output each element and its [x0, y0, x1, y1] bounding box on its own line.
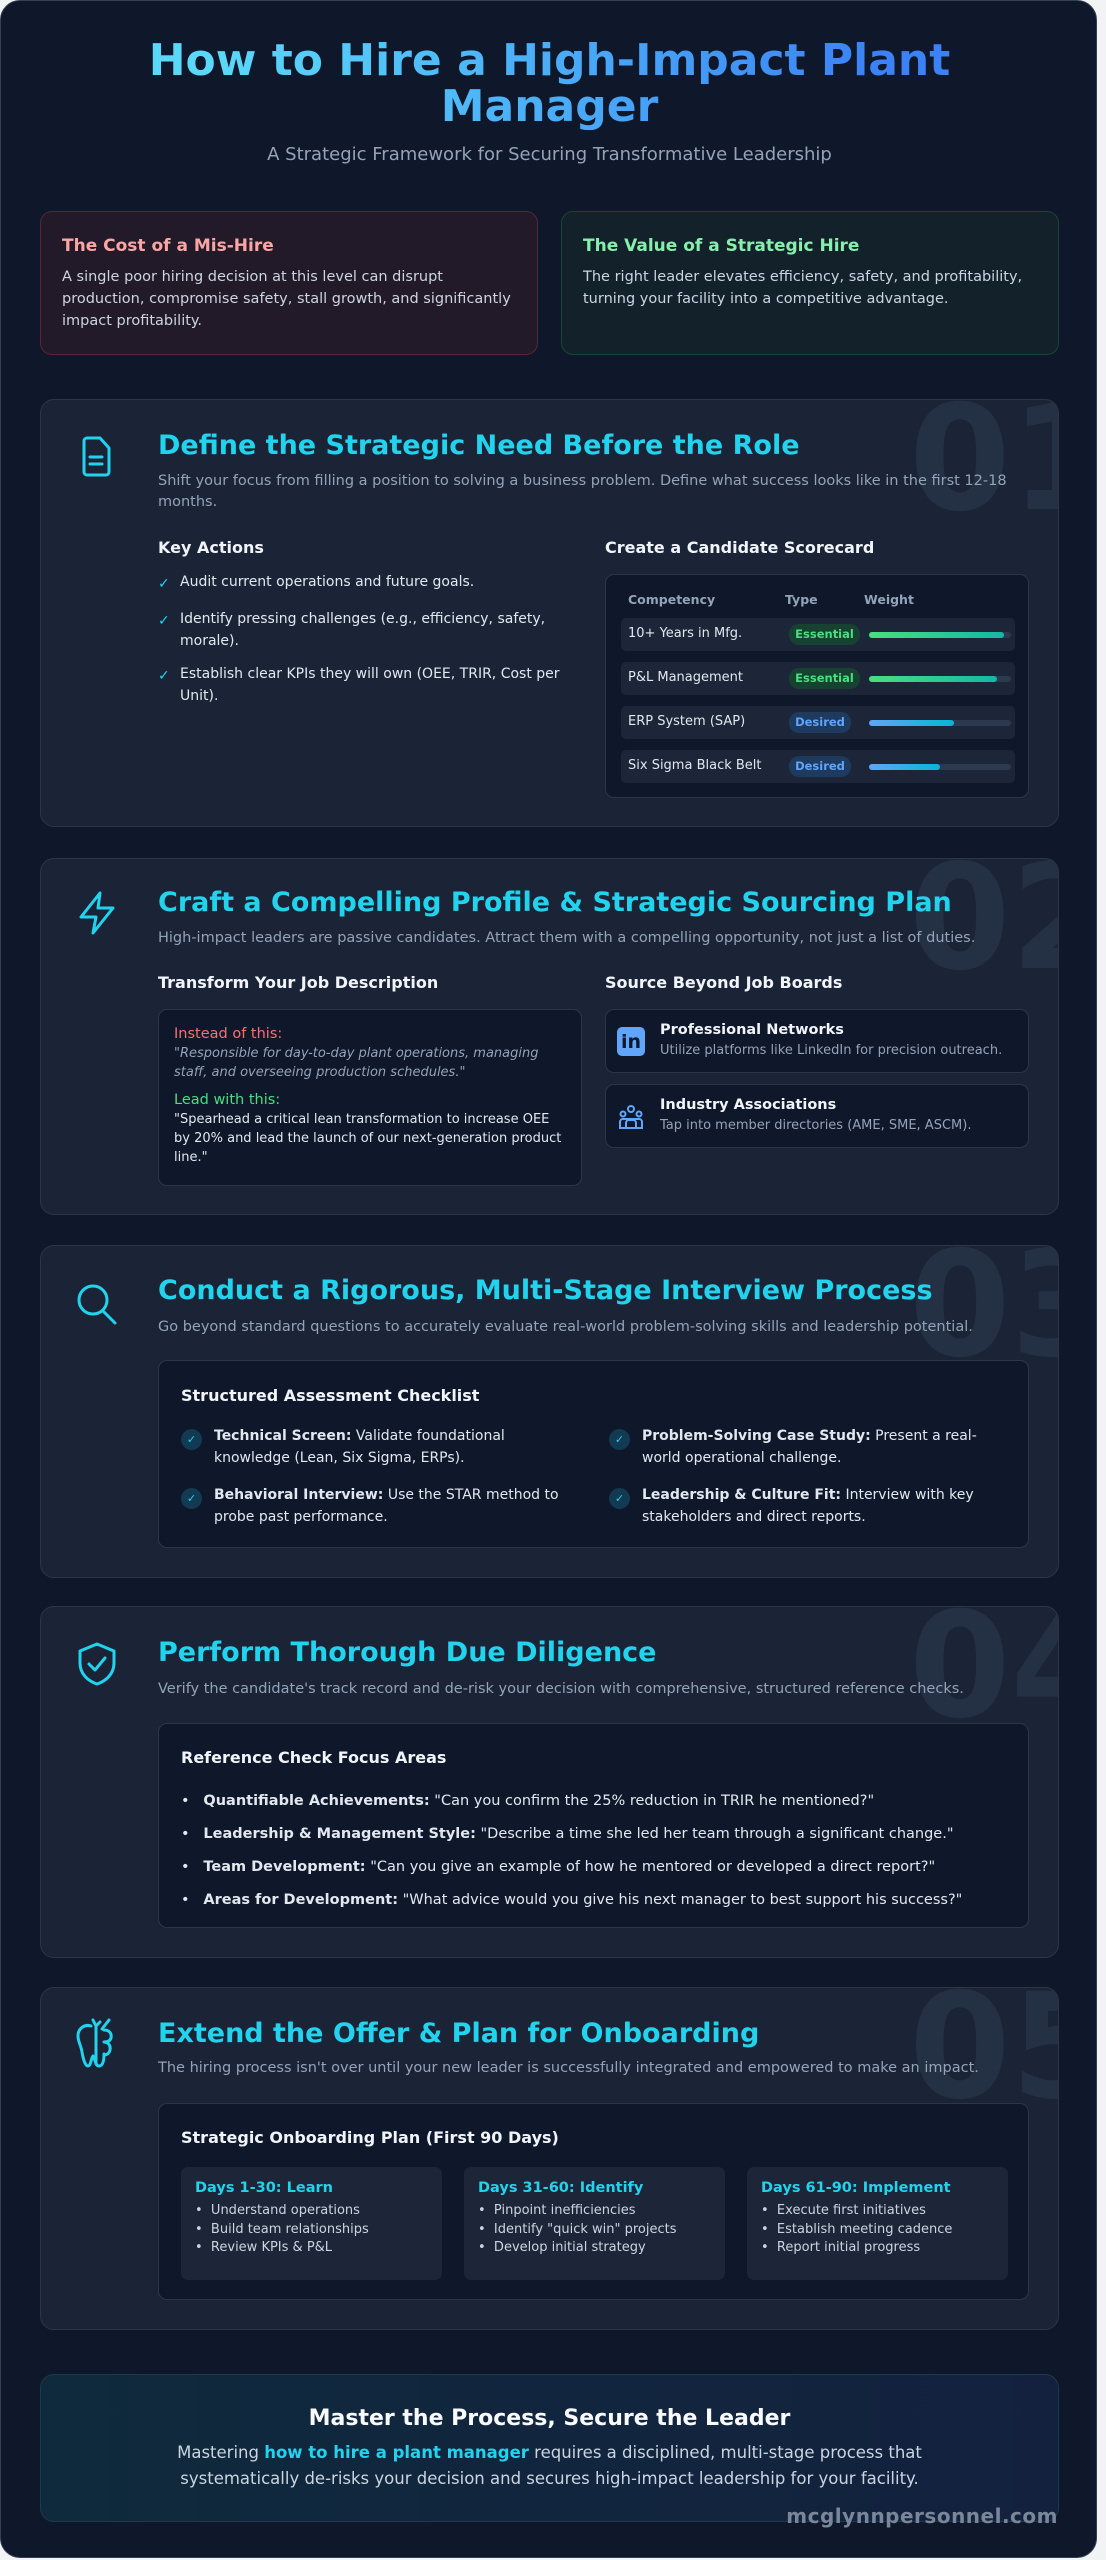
- card: cost of mis-hire: [40, 211, 538, 355]
- title: Manager: [441, 81, 658, 132]
- source: industry associations: Tap into member directories (AME, SME, ASCM).: [660, 1118, 971, 1133]
- title: [1, 38, 1098, 130]
- reference check: • Leadership & Management Style: "Describe a time she led her team through a significant change.": [181, 1826, 954, 1842]
- scorecard rows: Essential: [795, 627, 854, 641]
- source: professional networks: [605, 1009, 1029, 1073]
- checklist: Behavioral Interview: Use the STAR method to probe past performance.: [214, 1487, 559, 1525]
- source: professional networks: in: [621, 1031, 641, 1053]
- phase 1: • Review KPIs & P&L: [195, 2240, 332, 2255]
- panel: step 04: [40, 1606, 1059, 1958]
- icon: tooth: [76, 2018, 113, 2068]
- heading: Define the Strategic Need Before the Role: [158, 430, 800, 461]
- checklist: Problem-Solving Case Study: Present a real-world operational challenge.: [642, 1428, 977, 1466]
- panel: step 01: Type: [785, 592, 818, 607]
- icon: shield check: [78, 1642, 116, 1686]
- reference check: • Team Development: "Can you give an example of how he mentored or developed a direct report?": [181, 1859, 935, 1875]
- source: industry associations: [605, 1084, 1029, 1148]
- checklist: Leadership & Culture Fit: Interview with key stakeholders and direct reports.: [642, 1487, 974, 1525]
- checklist: ✓: [187, 1433, 196, 1446]
- scorecard rows: Six Sigma Black Belt: [628, 758, 762, 773]
- checklist: ✓: [615, 1492, 624, 1505]
- checklist: Structured Assessment Checklist: [181, 1386, 479, 1405]
- scorecard rows: P&L Management: [628, 670, 743, 685]
- scorecard rows: [621, 618, 1015, 783]
- source: professional networks: Professional Networks: [660, 1022, 844, 1038]
- heading: Craft a Compelling Profile & Strategic Sourcing Plan: [158, 887, 952, 918]
- key actions: ✓: [158, 668, 170, 684]
- description: Verify the candidate's track record and de-risk your decision with comprehensive, structured reference checks.: [158, 1681, 964, 1697]
- phase 1: • Understand operations: [195, 2203, 360, 2218]
- key actions: [158, 538, 560, 704]
- panel: step 01: [40, 399, 1059, 827]
- icon: search: [78, 1284, 117, 1325]
- key actions: Audit current operations and future goals.: [180, 574, 474, 590]
- icon: document: [82, 436, 110, 476]
- card: value of strategic hire: The Value of a Strategic Hire: [583, 236, 859, 256]
- sourcing: Source Beyond Job Boards: [605, 973, 842, 992]
- description: High-impact leaders are passive candidates. Attract them with a compelling opportunity, not just a list of duties.: [158, 930, 975, 946]
- phase 1: • Build team relationships: [195, 2222, 369, 2236]
- phase 2: • Develop initial strategy: [478, 2240, 646, 2255]
- onboarding plan: Strategic Onboarding Plan (First 90 Days): [181, 2128, 559, 2147]
- title: How to Hire a High-Impact Plant: [149, 35, 950, 86]
- reference check: • Quantifiable Achievements: "Can you confirm the 25% reduction in TRIR he mentioned?": [181, 1793, 874, 1809]
- key actions: Key Actions: [158, 538, 264, 557]
- key actions: Establish clear KPIs they will own (OEE, TRIR, Cost per Unit).: [180, 666, 560, 704]
- key actions: Identify pressing challenges (e.g., efficiency, safety, morale).: [180, 611, 545, 649]
- description: The hiring process isn't over until your new leader is successfully integrated and empowered to make an impact.: [158, 2060, 979, 2076]
- reference check: • Areas for Development: "What advice would you give his next manager to best support his success?": [181, 1892, 962, 1908]
- panel: step 02: "Spearhead a critical lean transformation to increase OEE by 20% and lead the launch of our next-generation product line.": [174, 1112, 561, 1165]
- panel: step 01: Weight: [864, 592, 914, 607]
- description: Shift your focus from filling a position to solving a business problem. Define what success looks like in the first 12-18 months.: [158, 473, 1007, 510]
- key actions: ✓: [158, 613, 170, 629]
- heading: Conduct a Rigorous, Multi-Stage Interview Process: [158, 1275, 933, 1306]
- scorecard: Create a Candidate Scorecard: [605, 538, 874, 557]
- description: Go beyond standard questions to accurately evaluate real-world problem-solving skills and leadership potential.: [158, 1319, 973, 1335]
- scorecard rows: Desired: [795, 715, 845, 729]
- phase 2: • Identify "quick win" projects: [478, 2222, 677, 2236]
- scorecard rows: ERP System (SAP): [628, 714, 745, 729]
- checklist: ✓: [615, 1433, 624, 1446]
- panel: step 02: [40, 858, 1059, 1215]
- phase 3: Days 61-90: Implement: [761, 2180, 951, 2196]
- phase 3: • Execute first initiatives: [761, 2203, 926, 2218]
- heading: Extend the Offer & Plan for Onboarding: [158, 2018, 759, 2049]
- phase 1: [181, 2167, 442, 2280]
- job description: Transform Your Job Description: [158, 973, 438, 992]
- checklist: [158, 1360, 1029, 1548]
- heading: Perform Thorough Due Diligence: [158, 1637, 656, 1668]
- source: professional networks: Utilize platforms like LinkedIn for precision outreach.: [660, 1043, 1002, 1058]
- phase 1: Days 1-30: Learn: [195, 2180, 333, 2196]
- scorecard rows: Desired: [795, 759, 845, 773]
- footer callout: Mastering how to hire a plant manager requires a disciplined, multi-stage process that systematically de-risks your decision and secures high-impact leadership for your facility.: [177, 2443, 922, 2488]
- phase 3: • Report initial progress: [761, 2240, 920, 2255]
- card: cost of mis-hire: The Cost of a Mis-Hire: [62, 236, 274, 256]
- panel: step 01: Competency: [628, 592, 715, 607]
- checklist: ✓: [187, 1492, 196, 1505]
- card: value of strategic hire: The right leader elevates efficiency, safety, and profitability, turning your facility into a competitive advantage.: [583, 269, 1022, 307]
- key actions: ✓: [158, 576, 170, 592]
- onboarding plan: [158, 2103, 1029, 2300]
- phase 3: • Establish meeting cadence: [761, 2222, 952, 2236]
- phase 2: Days 31-60: Identify: [478, 2180, 643, 2196]
- reference check: Reference Check Focus Areas: [181, 1748, 446, 1767]
- card: value of strategic hire: [561, 211, 1059, 355]
- card: cost of mis-hire: A single poor hiring decision at this level can disrupt production, compromise safety, stall growth, and significantly impact profitability.: [62, 269, 511, 329]
- reference check: [158, 1723, 1029, 1928]
- subtitle: A Strategic Framework for Securing Transformative Leadership: [267, 144, 832, 165]
- checklist: Technical Screen: Validate foundational knowledge (Lean, Six Sigma, ERPs).: [214, 1428, 505, 1466]
- source: industry associations: Industry Associations: [660, 1097, 836, 1113]
- footer callout: Master the Process, Secure the Leader: [309, 2406, 790, 2431]
- scorecard rows: 10+ Years in Mfg.: [628, 626, 742, 641]
- icon: lightning: [79, 892, 115, 934]
- phase 2: • Pinpoint inefficiencies: [478, 2203, 636, 2218]
- panel: step 02: "Responsible for day-to-day plant operations, managing staff, and overseeing production schedules.": [174, 1046, 538, 1080]
- phase 3: [747, 2167, 1008, 2280]
- panel: step 05: [40, 1987, 1059, 2330]
- panel: step 02: Instead of this:: [174, 1026, 282, 1042]
- footer callout: [40, 2374, 1059, 2522]
- panel: step 02: Lead with this:: [174, 1092, 280, 1108]
- phase 2: [464, 2167, 725, 2280]
- brand: mcglynnpersonnel.com: [786, 2504, 1058, 2528]
- scorecard rows: Essential: [795, 671, 854, 685]
- panel: step 03: [40, 1245, 1059, 1578]
